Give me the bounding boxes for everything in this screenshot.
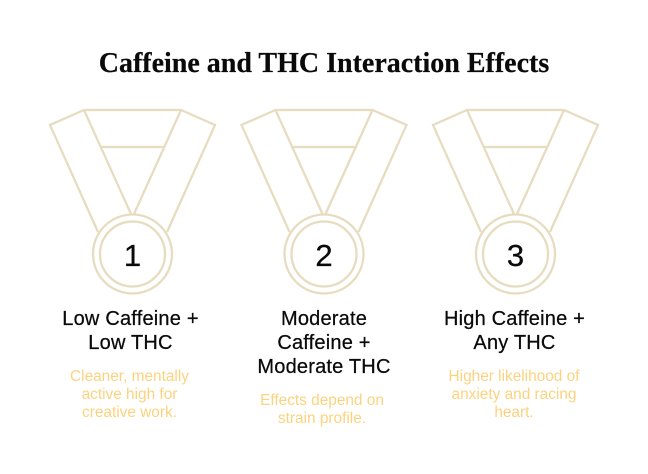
- heading 2: [257, 308, 391, 378]
- description 2: Effects depend on: [260, 392, 384, 409]
- description 3: heart.: [494, 404, 534, 421]
- medal 3: 3: [507, 238, 524, 273]
- description 3: anxiety and racing: [452, 386, 576, 403]
- description 1: Cleaner, mentally: [70, 368, 189, 385]
- medal 3: [433, 110, 598, 294]
- medal 2: 2: [315, 238, 333, 273]
- heading 2: Caffeine +: [277, 332, 371, 354]
- heading 3: Any THC: [473, 332, 556, 354]
- medal 2: [242, 110, 406, 294]
- heading 1: Low Caffeine +: [62, 308, 199, 330]
- description 3: Higher likelihood of: [449, 368, 579, 385]
- heading 3: [444, 308, 585, 354]
- description 1: active high for: [82, 386, 177, 403]
- heading 2: Moderate THC: [257, 356, 391, 378]
- heading 2: Moderate: [281, 308, 367, 330]
- medal 1: 1: [124, 238, 141, 273]
- heading 1: [62, 308, 199, 354]
- heading 3: High Caffeine +: [444, 308, 585, 330]
- description 1: creative work.: [82, 404, 177, 421]
- medal 1: [50, 110, 215, 294]
- heading 1: Low THC: [88, 332, 173, 354]
- description 1: [70, 368, 189, 421]
- description 2: strain profile.: [278, 410, 366, 427]
- description 2: [260, 392, 384, 427]
- title: Caffeine and THC Interaction Effects: [99, 48, 549, 79]
- description 3: [449, 368, 580, 421]
